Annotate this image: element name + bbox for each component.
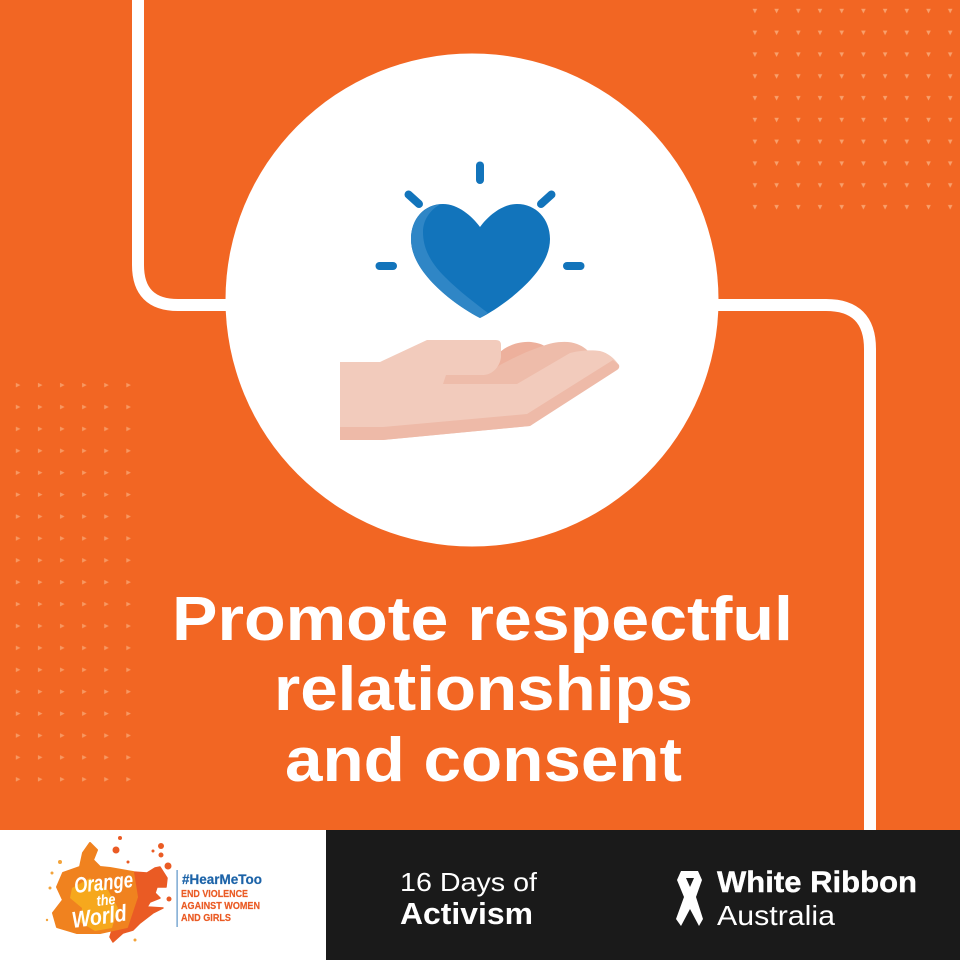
title: and consent [285, 726, 682, 795]
logo: campaign text: AND GIRLS [181, 912, 231, 924]
title: relationships [274, 655, 693, 724]
logo: campaign text: END VIOLENCE [181, 888, 248, 900]
splash: yellow centre [70, 878, 118, 931]
splash: wordmark: World [70, 899, 129, 933]
icon: heart with rays [380, 166, 580, 318]
footer: White Ribbon Australia [717, 866, 917, 931]
icon: heart highlight [411, 204, 488, 318]
splash: wordmark: the [96, 891, 116, 910]
hand: back finger [495, 342, 546, 375]
hand: lower shadow [340, 360, 619, 440]
white circle [226, 54, 718, 546]
title [172, 585, 793, 795]
footer: black panel [326, 830, 960, 960]
footer: 16 Days of Activism: Activism [400, 896, 533, 931]
footer: 16 Days of Activism [400, 867, 538, 931]
splash: droplets [112, 836, 172, 902]
title: Promote respectful [172, 585, 793, 654]
icon: open hand [340, 340, 619, 440]
logo: Orange the World splash [46, 836, 171, 942]
footer: White Ribbon Australia: Australia [717, 900, 835, 931]
connector line: right [700, 305, 870, 832]
logo: campaign text: #HearMeToo [182, 872, 262, 887]
hand: middle fingers [443, 342, 600, 392]
footer: White Ribbon Australia: White Ribbon [717, 866, 917, 899]
icon: white ribbon [676, 871, 703, 926]
splash: dark orange [110, 867, 167, 942]
footer: white logo panel [0, 830, 326, 960]
logo: campaign text: AGAINST WOMEN [181, 900, 260, 912]
connector line: left [138, 0, 240, 305]
icon: rays [380, 166, 580, 266]
splash: light orange [53, 843, 137, 933]
dot pattern: left [7, 374, 140, 790]
dot pattern: top right [744, 0, 960, 218]
hand: palm [340, 340, 619, 440]
footer: 16 Days of Activism: 16 Days of [400, 867, 538, 897]
logo: campaign text [181, 872, 262, 924]
icon: heart [411, 204, 550, 318]
splash: wordmark: Orange [73, 867, 134, 898]
splash: wordmark [70, 867, 134, 933]
logo divider [176, 870, 178, 927]
